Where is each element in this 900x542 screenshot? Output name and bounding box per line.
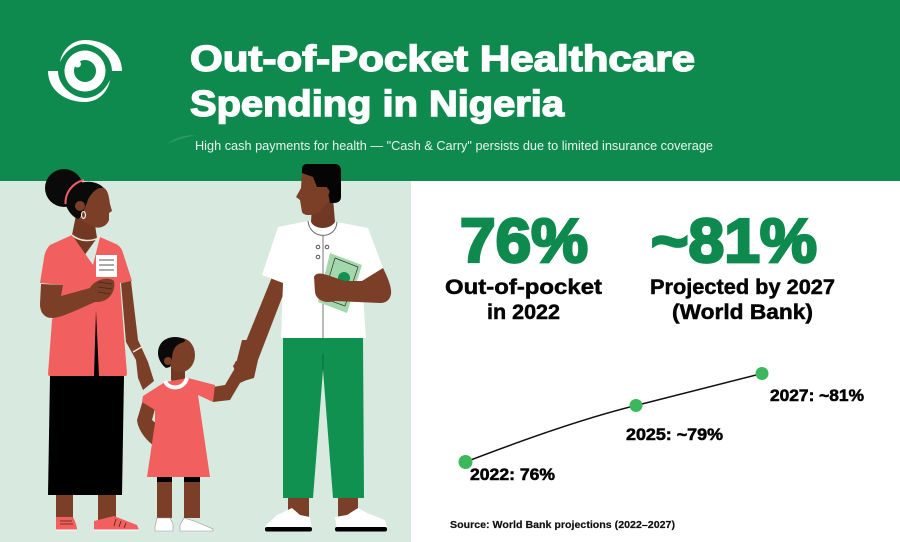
illustration: family — [40, 164, 391, 532]
stat: 76% — [445, 207, 602, 324]
line chart: 2022: 76% — [470, 465, 555, 484]
figure: man — [233, 164, 391, 532]
line chart: 2025: ~79% — [626, 425, 723, 444]
line chart: 2027: ~81% — [770, 386, 864, 405]
source note: Source: World Bank projections (2022–2027) — [450, 519, 675, 531]
stat label: out-of-pocket: in 2022 — [487, 301, 560, 324]
figure: woman — [40, 169, 154, 530]
subtitle: High cash payments for health — "Cash & Carry" persists due to limited insurance coverage — [195, 139, 713, 153]
stat label: out-of-pocket: Out-of-pocket — [445, 276, 602, 299]
icon: logo — [48, 40, 122, 102]
title — [190, 38, 695, 124]
stat: 81%: ~81% — [651, 207, 817, 276]
stat label: projected: (World Bank) — [672, 301, 813, 324]
stat label: projected — [650, 276, 835, 324]
stat label: projected: Projected by 2027 — [650, 276, 835, 299]
line chart — [458, 367, 864, 484]
stat: 81% — [650, 207, 835, 324]
title: Spending in Nigeria — [190, 83, 565, 124]
header band — [0, 0, 900, 181]
figure: child — [137, 337, 263, 531]
stat label: out-of-pocket — [445, 276, 602, 324]
stat: 76%: 76% — [460, 207, 588, 276]
illustration panel background — [0, 181, 411, 542]
title: Out-of-Pocket Healthcare — [190, 38, 695, 79]
